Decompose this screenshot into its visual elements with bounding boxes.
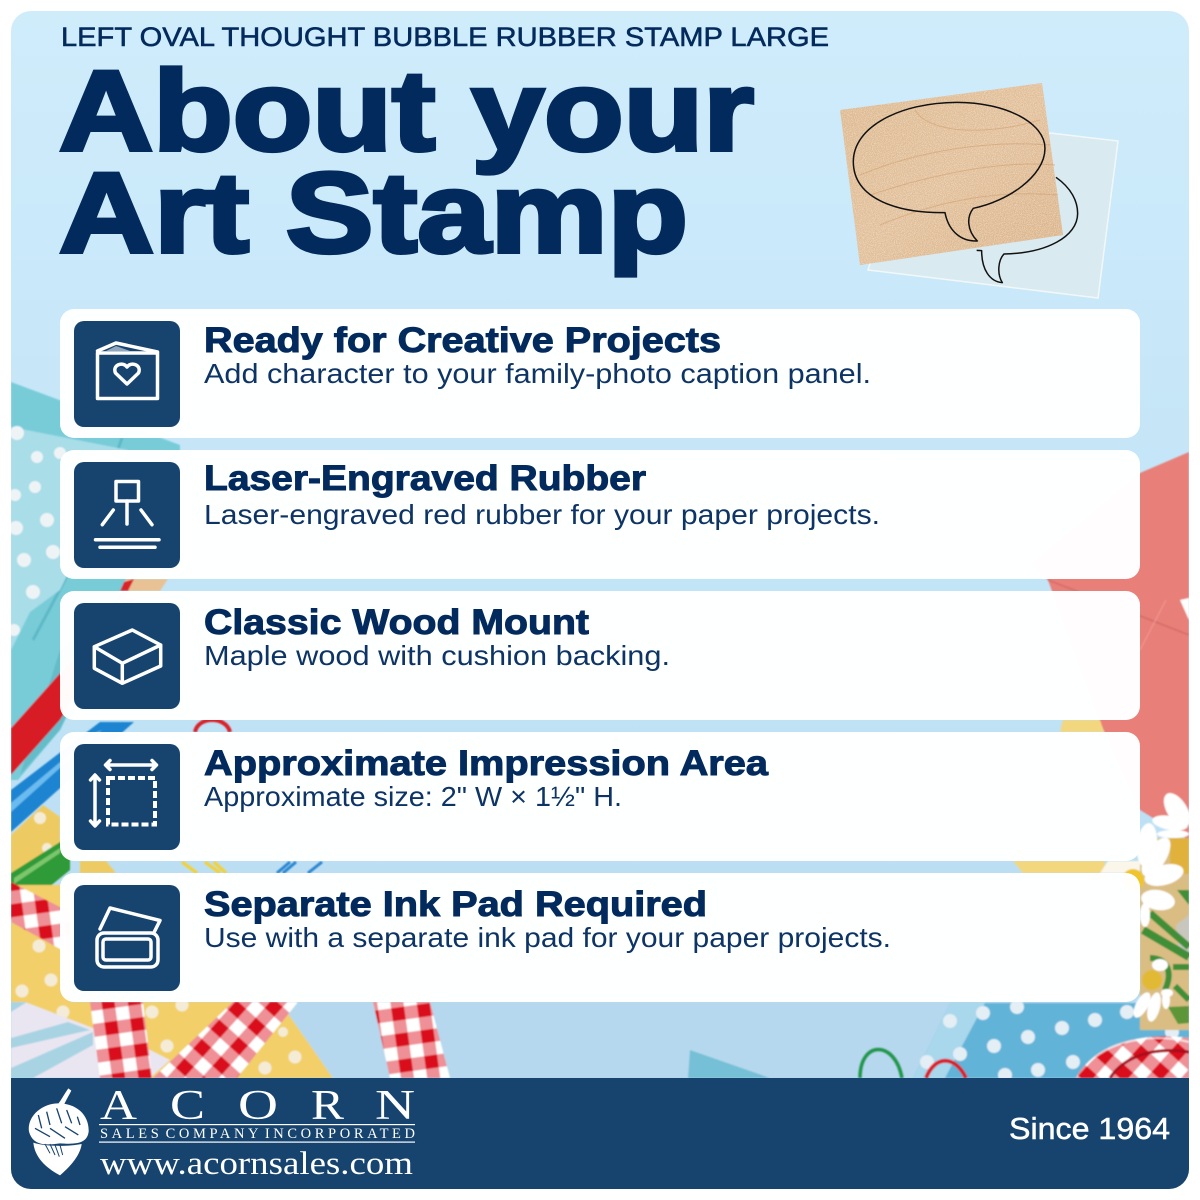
logo wordmark: C (170, 1083, 205, 1129)
feature card: impression area: Approximate size: 2" W × 1½" H. (204, 781, 622, 812)
feature card: ink pad (60, 873, 1140, 1002)
salmon envelope, right (1030, 452, 1189, 840)
logo wordmark: N (375, 1083, 415, 1129)
feature card: creative projects: Ready for Creative Projects (204, 321, 721, 360)
main title: Art Stamp (59, 150, 688, 277)
yellow dotted paper, left (11, 885, 333, 1078)
flowers and stems (1140, 838, 1189, 1030)
pencils (120, 579, 168, 591)
footer band (11, 1078, 1189, 1189)
icon: ink pad (74, 885, 180, 991)
feature card: ink pad: Separate Ink Pad Required (204, 885, 707, 924)
icon: laser engraver (74, 462, 180, 568)
icon: wood block (74, 603, 180, 709)
logo wordmark: SALES COMPANY INCORPORATED (100, 1126, 415, 1142)
feature card: laser-engraved rubber (60, 450, 1140, 579)
icon: card with heart (74, 321, 180, 427)
logo wordmark: A (100, 1083, 138, 1129)
feature card: wood mount (60, 591, 1140, 720)
since 1964 text: Since 1964 (1009, 1111, 1170, 1146)
logo wordmark (99, 1083, 415, 1182)
logo wordmark: www.acornsales.com (100, 1146, 413, 1182)
striped paper (11, 1002, 170, 1078)
teal envelopes, left (11, 382, 180, 780)
product image: wood stamp and clear impression card (840, 83, 1118, 298)
feature card: creative projects: Add character to your family-photo caption panel. (204, 358, 871, 389)
feature card: creative projects (60, 309, 1140, 438)
blue polka paper (944, 1002, 1189, 1078)
logo wordmark: R (311, 1083, 344, 1129)
main title: About your (59, 48, 754, 175)
gingham ribbon (90, 1002, 152, 1078)
pale blue paper, bottom centre (280, 1002, 1189, 1078)
paperclips (195, 720, 230, 732)
title eyebrow: LEFT OVAL THOUGHT BUBBLE RUBBER STAMP LARGE (61, 22, 829, 52)
feature card: ink pad: Use with a separate ink pad for your paper projects. (204, 922, 891, 953)
feature card: laser-engraved rubber: Laser-engraved red rubber for your paper projects. (204, 499, 880, 530)
icon: dimension arrows (74, 744, 180, 850)
yellow check paper (1060, 720, 1104, 732)
feature card: wood mount: Classic Wood Mount (204, 603, 589, 642)
ribbon roll (1076, 1036, 1189, 1078)
feature card: impression area (60, 732, 1140, 861)
feature card: impression area: Approximate Impression Area (204, 744, 769, 783)
feature card: wood mount: Maple wood with cushion backing. (204, 640, 670, 671)
feature card: laser-engraved rubber: Laser-Engraved Rubber (204, 459, 646, 498)
logo wordmark: O (238, 1083, 278, 1129)
icon: acorn logo (29, 1088, 89, 1175)
main title (59, 48, 754, 277)
